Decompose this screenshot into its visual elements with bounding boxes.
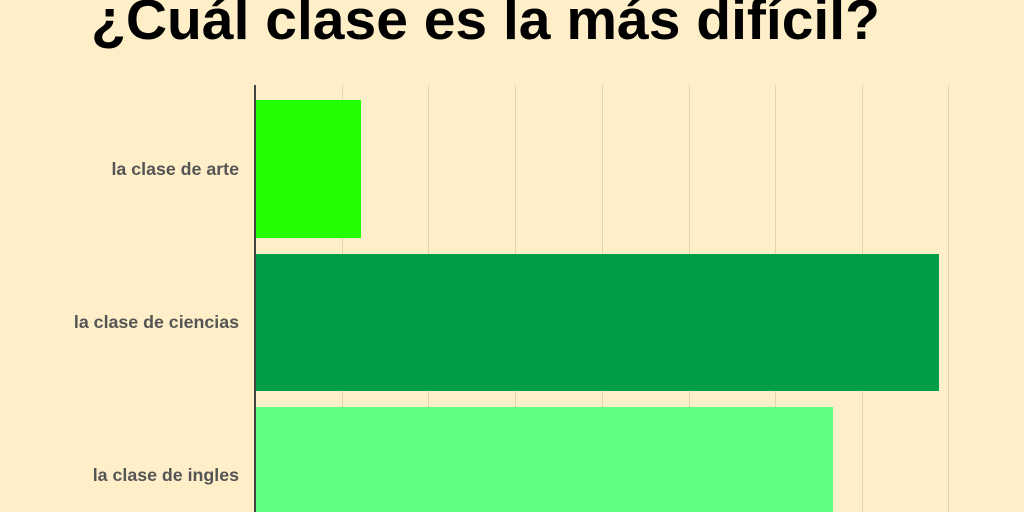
- axis: [254, 85, 256, 512]
- label: ingles: la clase de ingles: [93, 465, 239, 485]
- bar: arte: [256, 100, 361, 238]
- bar: ciencias: [256, 254, 939, 391]
- bar: ingles: [256, 407, 833, 512]
- label: ciencias: la clase de ciencias: [74, 312, 239, 332]
- label: arte: la clase de arte: [111, 159, 239, 179]
